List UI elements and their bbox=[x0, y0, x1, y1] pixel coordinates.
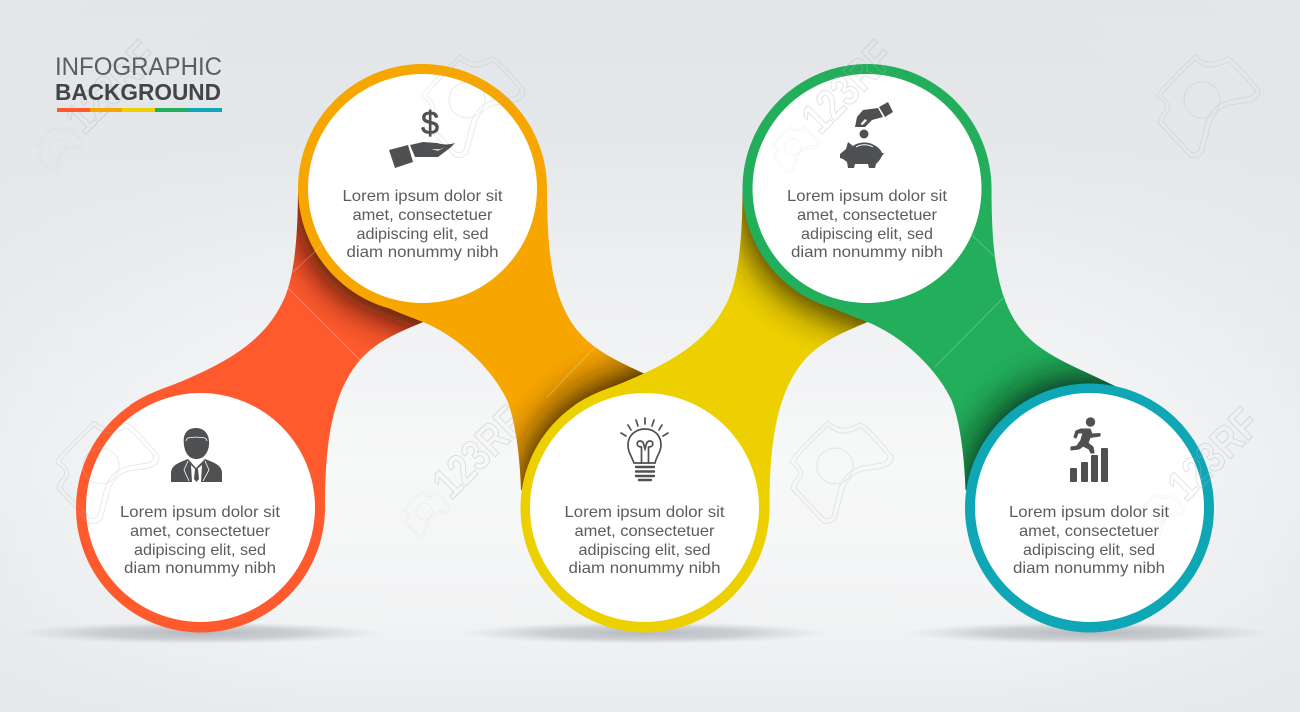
text: step 5: diam nonummy nibh bbox=[1013, 560, 1165, 577]
step 3 yellow band and ring bbox=[520, 188, 868, 632]
text: step 3: diam nonummy nibh bbox=[568, 560, 720, 577]
step 1 red band and ring bbox=[76, 188, 423, 632]
watermark top right bbox=[772, 126, 820, 173]
text: step 3: amet, consectetuer bbox=[574, 523, 715, 540]
small 123RF watermarks: 123RF bbox=[792, 32, 903, 143]
watermark centre bbox=[403, 491, 451, 538]
text: step 4 bbox=[787, 188, 948, 261]
text: step 2 bbox=[342, 188, 503, 261]
ground shadows bbox=[15, 622, 1274, 644]
text: step 2: adipiscing elit, sed bbox=[356, 226, 488, 243]
shadow of green ring on yellow band bbox=[734, 190, 868, 346]
text: step 1: amet, consectetuer bbox=[130, 523, 271, 540]
watermark hairlines bbox=[288, 235, 1003, 397]
icon: businessman bbox=[171, 428, 222, 482]
icon: light bulb bbox=[621, 418, 668, 480]
text: step 5: Lorem ipsum dolor sit bbox=[1009, 504, 1170, 521]
title colour bar bbox=[57, 108, 222, 112]
text: step 1: diam nonummy nibh bbox=[124, 560, 276, 577]
title line one: INFOGRAPHIC bbox=[55, 53, 222, 81]
step 4 green band and ring bbox=[742, 64, 1144, 507]
text: step 5: adipiscing elit, sed bbox=[1023, 542, 1155, 559]
icon: runner on bars bbox=[1070, 417, 1108, 482]
step 5 teal ring bbox=[965, 384, 1214, 632]
text: step 4: diam nonummy nibh bbox=[791, 244, 943, 261]
text: step 4: Lorem ipsum dolor sit bbox=[787, 188, 948, 205]
small 123RF watermarks: 123RF bbox=[1158, 399, 1269, 510]
watermark top left bbox=[36, 126, 84, 173]
text: step 2: amet, consectetuer bbox=[352, 207, 493, 224]
text: step 1: Lorem ipsum dolor sit bbox=[120, 504, 281, 521]
text: step 2: diam nonummy nibh bbox=[346, 244, 498, 261]
watermark right bbox=[1138, 493, 1186, 540]
text: step 1 bbox=[120, 504, 281, 577]
large watermarks bbox=[56, 55, 1260, 524]
shadow of teal ring on green band bbox=[958, 354, 1116, 490]
text: step 3: Lorem ipsum dolor sit bbox=[564, 504, 725, 521]
text: step 4: amet, consectetuer bbox=[797, 207, 938, 224]
step 2 orange band and ring bbox=[298, 64, 700, 507]
text: step 4: adipiscing elit, sed bbox=[801, 226, 933, 243]
shadow of yellow ring on orange band bbox=[513, 350, 644, 490]
text: step 3: adipiscing elit, sed bbox=[578, 542, 710, 559]
title line two: BACKGROUND bbox=[55, 79, 221, 105]
small 123RF watermarks: 123RF bbox=[56, 32, 167, 143]
icon: hand with dollar bbox=[389, 105, 455, 168]
icon: hand with dollar: $ bbox=[421, 105, 439, 141]
shadow of orange ring on red band bbox=[290, 190, 423, 346]
text: step 3 bbox=[564, 504, 725, 577]
small 123RF watermarks: 123RF bbox=[423, 397, 534, 508]
text: step 1: adipiscing elit, sed bbox=[134, 542, 266, 559]
title block bbox=[55, 53, 222, 112]
icon: piggy bank bbox=[840, 102, 893, 168]
text: step 5 bbox=[1009, 504, 1170, 577]
text: step 2: Lorem ipsum dolor sit bbox=[342, 188, 503, 205]
text: step 5: amet, consectetuer bbox=[1019, 523, 1160, 540]
small 123RF watermarks bbox=[36, 32, 1269, 540]
